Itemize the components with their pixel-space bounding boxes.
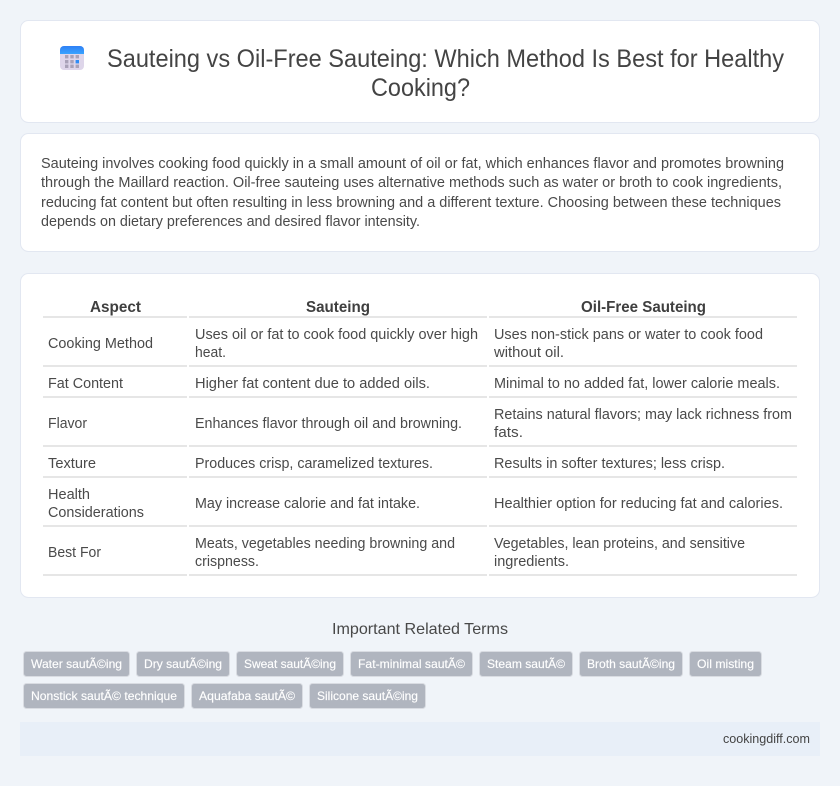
title: Sauteing vs Oil-Free Sauteing: Which Method Is Best for Healthy [107, 45, 784, 73]
row: fat content [48, 376, 780, 392]
row: best for: Meats, vegetables needing browning and [195, 536, 455, 552]
table header row: Sauteing [306, 299, 370, 316]
row: flavor: fats. [494, 425, 523, 441]
row: flavor [48, 407, 792, 441]
text block: introduction: through the Maillard reaction. Oil-free sauteing uses alternative methods such as water or broth to cook ingredients, [41, 175, 782, 191]
icon: calendar [60, 46, 84, 70]
tags: related terms: Oil misting [697, 657, 754, 671]
title [107, 45, 784, 102]
tags: related terms: Dry sautÃ©ing [144, 657, 222, 671]
row: fat content: Minimal to no added fat, lower calorie meals. [494, 376, 780, 392]
row: fat content: Higher fat content due to added oils. [195, 376, 430, 392]
row: best for [48, 536, 745, 570]
footer [20, 722, 820, 756]
text block: introduction: reducing fat content but often resulting in less browning and a different texture. Choosing between these techniques [41, 195, 781, 211]
tags: related terms [24, 652, 762, 708]
row: texture: Produces crisp, caramelized textures. [195, 456, 433, 472]
row: texture [48, 456, 725, 472]
tags: related terms: Silicone sautÃ©ing [317, 689, 418, 703]
text block: introduction: depends on dietary preferences and desired flavor intensity. [41, 214, 420, 230]
panel: comparison table [20, 274, 820, 598]
row: health considerations: Considerations [48, 505, 144, 521]
table header row: Oil-Free Sauteing [581, 299, 706, 316]
row: cooking method: Cooking Method [48, 336, 153, 352]
footer: cookingdiff.com [723, 732, 810, 746]
row: health considerations [48, 487, 783, 521]
row: health considerations: Health [48, 487, 90, 503]
row: best for: crispness. [195, 554, 259, 570]
title: Cooking? [371, 74, 470, 102]
table header row: Aspect [90, 299, 142, 316]
row: flavor: Flavor [48, 416, 87, 432]
row: texture: Results in softer textures; less crisp. [494, 456, 725, 472]
row: best for: Best For [48, 545, 101, 561]
panel: introduction [20, 134, 820, 252]
tags: related terms: Nonstick sautÃ© technique [31, 689, 177, 703]
row: health considerations: May increase calorie and fat intake. [195, 496, 420, 512]
row: texture: Texture [48, 456, 96, 472]
row: flavor: Retains natural flavors; may lack richness from [494, 407, 792, 423]
row: cooking method: Uses non-stick pans or water to cook food [494, 327, 763, 343]
tags: related terms: Aquafaba sautÃ© [199, 689, 295, 703]
row: best for: ingredients. [494, 554, 569, 570]
tags: related terms: Fat-minimal sautÃ© [358, 657, 465, 671]
row: health considerations: Healthier option for reducing fat and calories. [494, 496, 783, 512]
heading: important related terms: Important Related Terms [332, 621, 508, 638]
tags: related terms: Sweat sautÃ©ing [244, 657, 336, 671]
row: cooking method: heat. [195, 345, 226, 361]
panel: header [20, 20, 820, 122]
row: fat content: Fat Content [48, 376, 123, 392]
tags: related terms: Steam sautÃ© [487, 657, 565, 671]
row: best for: Vegetables, lean proteins, and sensitive [494, 536, 745, 552]
text block: introduction [41, 156, 784, 230]
row: cooking method: without oil. [493, 345, 564, 361]
row: flavor: Enhances flavor through oil and browning. [195, 416, 462, 432]
text block: introduction: Sauteing involves cooking food quickly in a small amount of oil or fat, which enhances flavor and promotes browning [41, 156, 784, 172]
row: cooking method [48, 327, 763, 361]
table header row [90, 299, 706, 316]
row: cooking method: Uses oil or fat to cook food quickly over high [195, 327, 478, 343]
tags: related terms: Water sautÃ©ing [31, 657, 122, 671]
tags: related terms: Broth sautÃ©ing [587, 657, 675, 671]
